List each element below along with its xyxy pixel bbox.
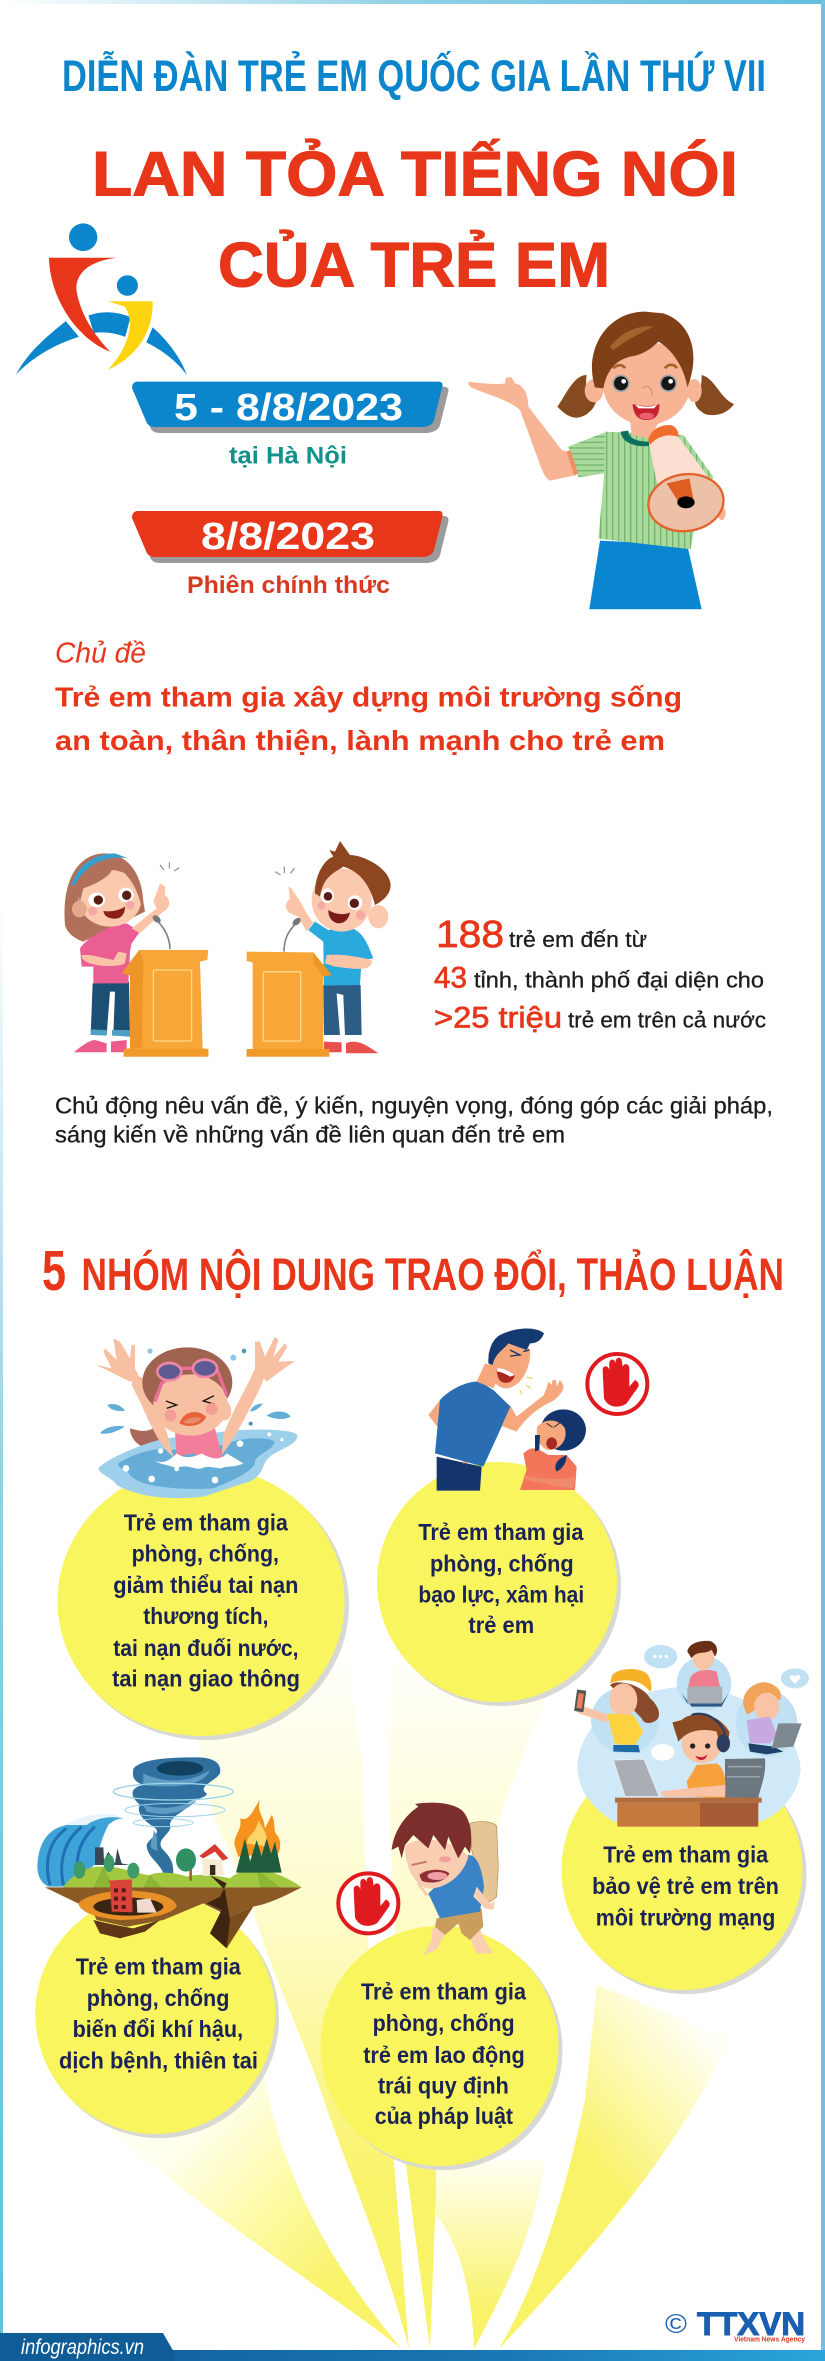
circle: group 1 background: [58, 1466, 349, 1740]
icon: children online: [574, 1641, 809, 1827]
text block: description: [55, 1092, 773, 1148]
illustration: girl at podium: [64, 853, 208, 1057]
text: group 3: bảo vệ trẻ em trên: [592, 1873, 779, 1899]
stats: participants: trẻ em trên cả nước: [568, 1008, 766, 1033]
badge: date 5 - 8/8/2023: 5 - 8/8/2023: [174, 387, 403, 429]
text: group 2: bạo lực, xâm hại: [418, 1582, 584, 1608]
text block: theme: [55, 638, 682, 756]
circle: group 5 background: [320, 1926, 562, 2170]
title: main line one: LAN TỎA TIẾNG NÓI: [92, 139, 738, 210]
panel: group 4: [35, 1757, 302, 2138]
text: group 4: phòng, chống: [87, 1985, 229, 2011]
text: group 5: của pháp luật: [375, 2103, 513, 2129]
text block: theme: Trẻ em tham gia xây dựng môi trường sống: [55, 682, 682, 713]
icon: natural disasters: [37, 1757, 302, 1948]
heading: five discussion groups: 5: [42, 1239, 66, 1303]
badge: date 8/8/2023: 8/8/2023: [201, 516, 375, 558]
icon: stop hand: [587, 1354, 647, 1414]
text: group 4: biến đổi khí hậu,: [73, 2016, 243, 2042]
badge: date 8/8/2023: [132, 511, 448, 563]
circle: group 3 background: [562, 1750, 806, 1994]
text block: description: Chủ động nêu vấn đề, ý kiến, nguyện vọng, đóng góp các giải pháp,: [55, 1092, 773, 1118]
text: group 2: trẻ em: [468, 1612, 534, 1638]
icon: adult shouting at child: [428, 1329, 586, 1491]
text: group 5: [361, 1979, 526, 2129]
text: group 3: môi trường mạng: [596, 1905, 775, 1931]
illustration: girl with megaphone: [468, 312, 734, 609]
text: group 3: [592, 1842, 779, 1931]
title: main line two: CỦA TRẺ EM: [218, 230, 610, 301]
text: group 1: [112, 1510, 300, 1692]
panel: group 2: [377, 1329, 647, 1706]
text: group 4: [59, 1954, 258, 2074]
light rays: [111, 1640, 730, 2349]
text: group 1: Trẻ em tham gia: [124, 1510, 288, 1536]
text: group 1: giảm thiểu tai nạn: [113, 1572, 298, 1598]
logo: TTXVN: ©: [665, 2309, 687, 2339]
text: group 4: Trẻ em tham gia: [76, 1954, 241, 1980]
stats: participants: [434, 914, 766, 1035]
text: group 5: trẻ em lao động: [363, 2042, 525, 2068]
footer bar: infographics.vn: [21, 2336, 144, 2359]
text: group 1: phòng, chống,: [132, 1541, 279, 1567]
text block: theme: an toàn, thân thiện, lành mạnh cho trẻ em: [55, 725, 665, 756]
illustration: boy at podium: [247, 841, 391, 1057]
logo: TTXVN: TTXVN: [697, 2306, 805, 2342]
icon: stop hand: [338, 1873, 398, 1933]
panel: group 5: [320, 1803, 562, 2170]
stats: participants: tỉnh, thành phố đại diện cho: [474, 968, 764, 993]
text: group 5: trái quy định: [378, 2072, 509, 2098]
stats: participants: >25 triệu: [434, 1002, 562, 1035]
stats: participants: trẻ em đến từ: [509, 927, 647, 952]
footer bar: [0, 2333, 825, 2361]
panel: group 3: [562, 1641, 809, 1994]
text: group 3: Trẻ em tham gia: [603, 1842, 768, 1868]
text: group 1: thương tích,: [143, 1603, 268, 1629]
text: group 1: tai nạn đuối nước,: [113, 1635, 298, 1661]
text block: theme: Chủ đề: [55, 638, 146, 670]
stats: participants: 188: [436, 914, 504, 956]
text: group 5: phòng, chống: [373, 2010, 515, 2036]
circle: group 4 background: [35, 1894, 279, 2138]
text: group 2: phòng, chống: [430, 1551, 574, 1577]
text: group 5: Trẻ em tham gia: [361, 1979, 526, 2005]
logo: TTXVN: Vietnam News Agency: [734, 2336, 805, 2344]
icon: drowning girl: [95, 1337, 297, 1498]
text: group 1: tai nạn giao thông: [112, 1666, 300, 1692]
text block: description: sáng kiến về những vấn đề liên quan đến trẻ em: [55, 1122, 565, 1148]
stats: participants: 43: [434, 962, 467, 995]
panel: group 1: [58, 1337, 349, 1740]
circle: group 2 background: [377, 1462, 621, 1706]
text: group 2: Trẻ em tham gia: [418, 1519, 584, 1545]
badge: date 5 - 8/8/2023: [132, 382, 448, 433]
label: official session: Phiên chính thức: [187, 572, 390, 599]
label: location: tại Hà Nội: [229, 442, 347, 470]
icon: child laborer: [392, 1803, 498, 1955]
text: group 2: [418, 1519, 584, 1638]
icon: forum logo: [16, 223, 187, 375]
text: group 4: dịch bệnh, thiên tai: [59, 2048, 258, 2074]
